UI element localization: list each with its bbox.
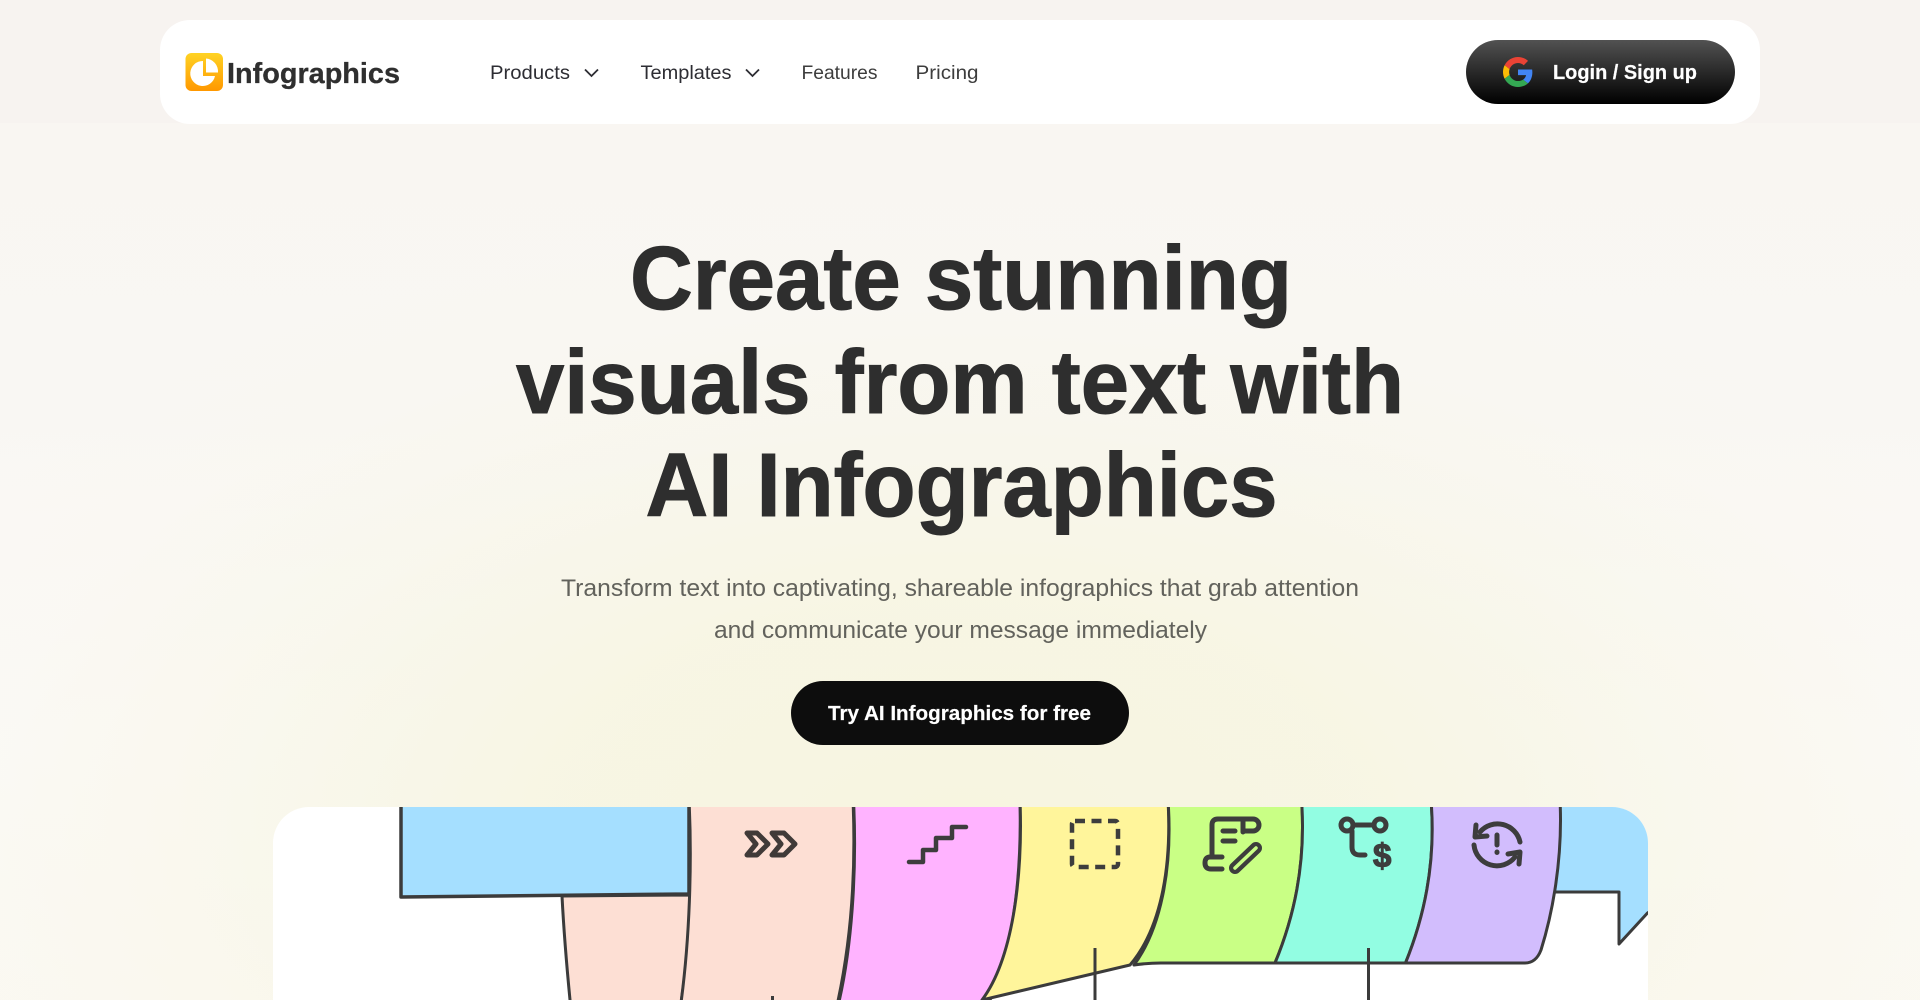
magenta band	[837, 800, 1020, 1000]
title: Create stunning	[630, 229, 1292, 329]
icon: scroll with pencil	[1205, 819, 1259, 869]
icon: dashed square	[1072, 821, 1118, 867]
icon: logo pie chart	[186, 53, 223, 91]
title	[516, 229, 1404, 536]
menu: Products: Products	[490, 62, 570, 84]
login button	[1466, 40, 1735, 104]
call to action button: Try AI Infographics for free	[828, 702, 1091, 725]
subtitle: Transform text into captivating, shareable infographics that grab attention	[561, 575, 1359, 602]
green band	[1134, 800, 1303, 965]
brand name: Infographics	[227, 58, 400, 90]
chart: curved band infographic	[401, 800, 1660, 1000]
menu: Pricing: Pricing	[916, 62, 978, 84]
menu: Features: Features	[802, 62, 878, 84]
icon: refresh warning	[1474, 824, 1520, 866]
icon: route with dollar	[1341, 819, 1391, 874]
icon: double chevron	[747, 833, 795, 855]
purple band	[1406, 800, 1561, 963]
icon: route with dollar: $	[1373, 837, 1391, 874]
yellow band	[982, 800, 1169, 1000]
blue arrow tail	[1556, 807, 1648, 946]
navigation bar	[160, 20, 1760, 124]
call to action button	[791, 681, 1129, 745]
leader line 1	[771, 996, 774, 1000]
subtitle	[561, 575, 1359, 644]
leader line 2	[1094, 948, 1096, 1000]
teal band	[1275, 800, 1432, 963]
title: AI Infographics	[646, 436, 1278, 536]
icon: Google logo	[1503, 57, 1532, 87]
blue banner	[401, 800, 689, 897]
title: visuals from text with	[516, 333, 1404, 433]
icon: stairs	[909, 827, 966, 862]
peach lower band	[562, 895, 690, 1000]
subtitle: and communicate your message immediately	[714, 617, 1208, 644]
panel: infographic preview	[273, 800, 1660, 1000]
peach band	[680, 800, 854, 1000]
menu: Templates: Templates	[640, 62, 732, 84]
leader line 3	[1367, 948, 1370, 1000]
login label: Login / Sign up	[1553, 62, 1697, 84]
